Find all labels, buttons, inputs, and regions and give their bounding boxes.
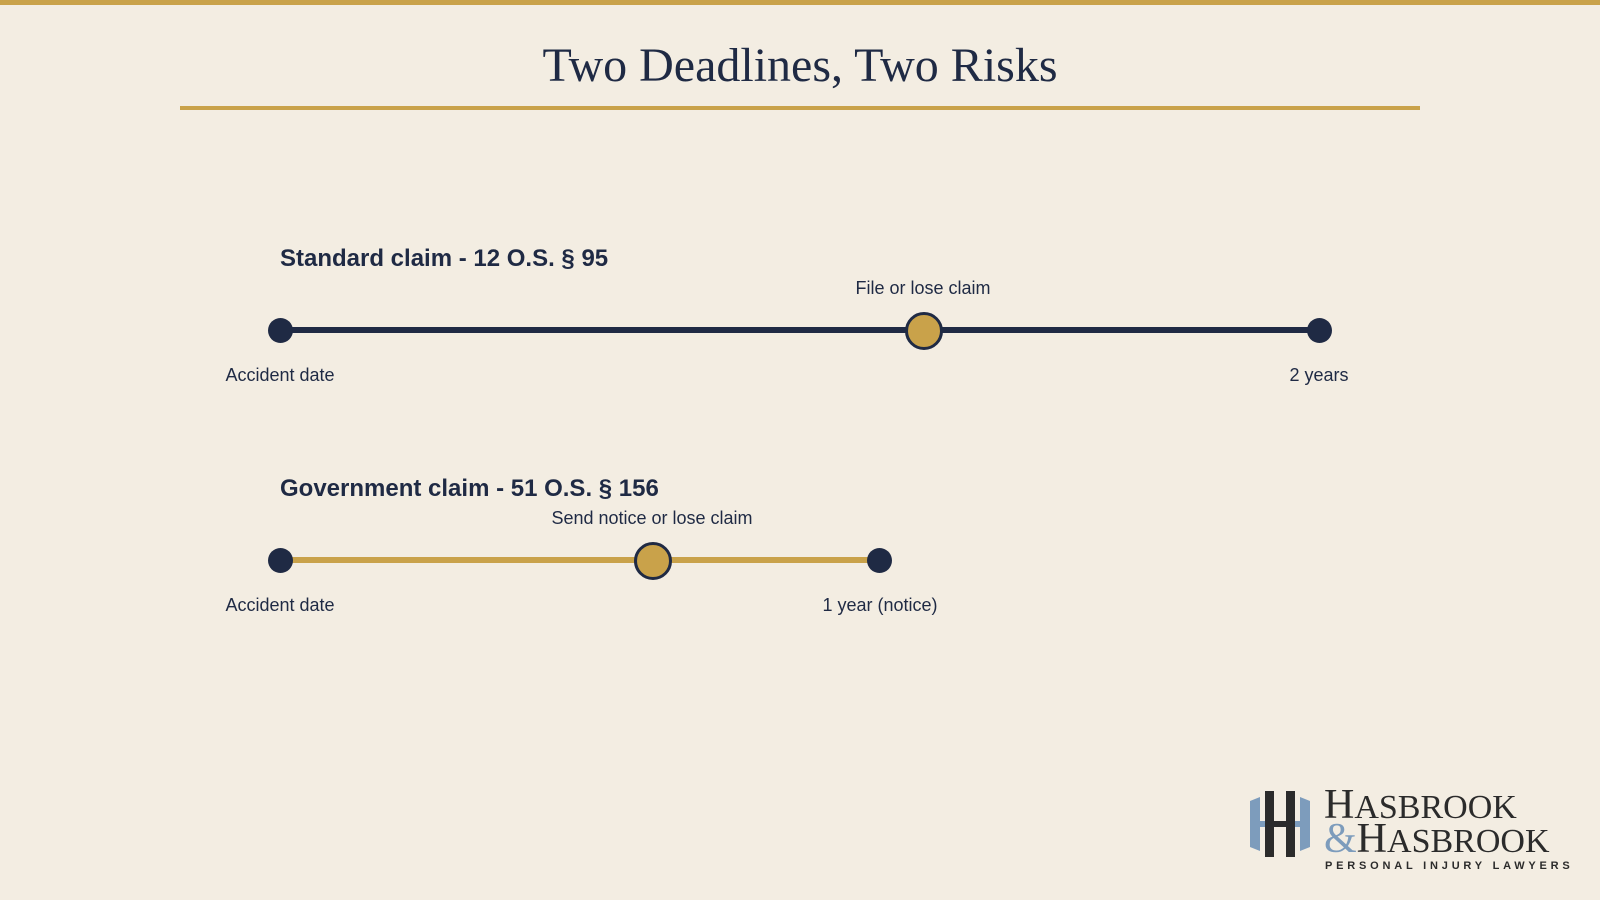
logo xyxy=(1250,782,1574,872)
end label: 2 years xyxy=(1289,365,1349,385)
start dot xyxy=(268,548,293,573)
milestone marker xyxy=(634,542,672,580)
timeline: standard claim xyxy=(225,245,1349,385)
line xyxy=(281,557,880,563)
line xyxy=(281,327,1320,333)
icon: H monogram xyxy=(1250,791,1310,857)
milestone label: File or lose claim xyxy=(855,278,991,298)
timeline: government claim xyxy=(225,475,938,615)
logo text: &HASBROOK xyxy=(1324,816,1550,862)
logo text xyxy=(1324,782,1550,862)
logo: PERSONAL INJURY LAWYERS xyxy=(1325,860,1574,872)
end dot xyxy=(867,548,892,573)
end dot xyxy=(1307,318,1332,343)
start label: Accident date xyxy=(225,595,335,615)
milestone marker xyxy=(905,312,943,350)
end label: 1 year (notice) xyxy=(822,595,938,615)
heading: government claim: Government claim - 51 O.S. § 156 xyxy=(280,475,659,502)
title: Two Deadlines, Two Risks xyxy=(542,39,1058,92)
logo text: HASBROOK xyxy=(1324,782,1517,828)
milestone label: Send notice or lose claim xyxy=(551,508,753,528)
start dot xyxy=(268,318,293,343)
heading: standard claim: Standard claim - 12 O.S. § 95 xyxy=(280,245,608,272)
start label: Accident date xyxy=(225,365,335,385)
